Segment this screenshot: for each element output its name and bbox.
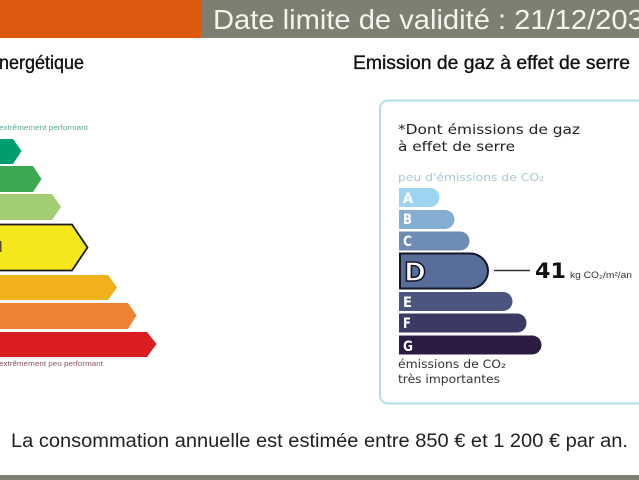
bar F: F xyxy=(403,316,411,332)
high emissions label: très importantes xyxy=(398,372,500,386)
heading: emissions: Emission de gaz à effet de serre xyxy=(353,53,630,74)
footer band xyxy=(0,475,639,480)
heading: energy: nergétique xyxy=(0,53,84,74)
bar B: B xyxy=(403,212,412,228)
bar C xyxy=(0,194,61,220)
bar F xyxy=(0,303,136,329)
bar B xyxy=(399,210,454,229)
bar E xyxy=(399,292,512,311)
bar C: C xyxy=(403,234,412,250)
energy rating chart xyxy=(0,125,156,368)
annual cost estimate: La consommation annuelle est estimée entre 850 € et 1 200 € par an. xyxy=(11,431,628,452)
top label: extrêmement performant xyxy=(0,125,88,132)
bar D: D xyxy=(404,258,426,288)
bar C xyxy=(399,232,470,250)
bar E xyxy=(0,275,117,300)
bottom label: extrêmement peu performant xyxy=(0,359,104,368)
bar D xyxy=(400,254,488,288)
bar G: G xyxy=(403,339,413,355)
bar G xyxy=(399,336,542,355)
panel title: à effet de serre xyxy=(398,139,515,155)
bar A xyxy=(0,139,22,164)
bar D letter fragment xyxy=(0,241,2,252)
bar F xyxy=(399,314,526,332)
header orange band xyxy=(0,0,201,38)
value unit: kg CO₂/m²/an xyxy=(570,270,632,280)
value 41: 41 xyxy=(535,259,566,283)
bar E: E xyxy=(403,295,412,311)
bar A: A xyxy=(403,191,413,207)
low emissions label: peu d'émissions de CO₂ xyxy=(398,171,544,184)
header validity band: Date limite de validité : 21/12/2031 xyxy=(213,4,639,35)
bar G xyxy=(0,332,156,357)
value connector xyxy=(494,270,530,272)
bar D xyxy=(0,224,88,270)
panel: greenhouse gas xyxy=(380,100,639,404)
bar A xyxy=(399,188,440,207)
high emissions label: émissions de CO₂ xyxy=(398,357,506,371)
panel title: *Dont émissions de gaz xyxy=(398,122,580,138)
bar B xyxy=(0,166,42,192)
